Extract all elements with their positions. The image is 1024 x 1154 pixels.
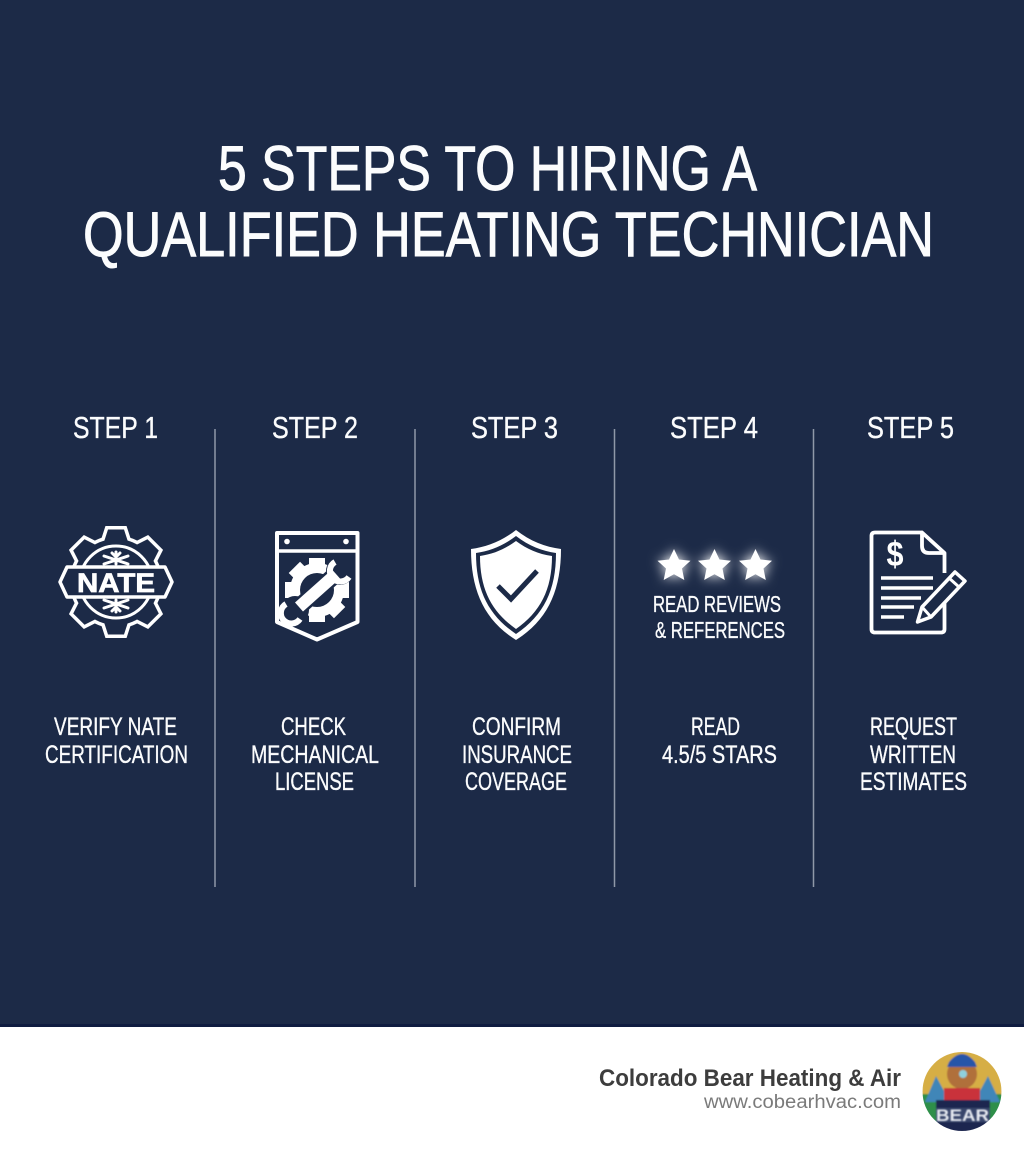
icon: written estimate document with pencil — [872, 532, 965, 632]
step 2 description: LICENSE — [275, 768, 354, 796]
step 1 description: CERTIFICATION — [45, 741, 188, 769]
logo: Colorado Bear badge — [922, 1050, 1002, 1132]
step 5 description — [860, 713, 967, 796]
step 3 description: INSURANCE — [462, 741, 572, 769]
panel: step 1 — [45, 410, 188, 769]
icon: NATE gear badge: NATE — [77, 568, 155, 598]
step 2 description: CHECK — [281, 713, 346, 741]
panel: step 4 — [653, 410, 785, 769]
step 2 heading: STEP 2 — [272, 410, 358, 445]
step 5 description: ESTIMATES — [860, 768, 967, 796]
step 2 description: MECHANICAL — [251, 741, 379, 769]
step 1 description — [45, 713, 188, 769]
step 1 description: VERIFY NATE — [54, 713, 177, 741]
panel: step 2 — [251, 410, 379, 796]
read reviews caption: & REFERENCES — [655, 617, 785, 643]
read reviews caption — [653, 591, 785, 643]
icon: three glowing stars — [658, 549, 772, 580]
step 3 description: CONFIRM — [472, 713, 561, 741]
icon: license shield with gear and wrench — [276, 533, 358, 640]
logo: Colorado Bear badge: BEAR — [936, 1106, 989, 1125]
panel: step 5 — [860, 410, 967, 796]
read reviews caption: READ REVIEWS — [653, 591, 781, 617]
step 5 description: WRITTEN — [870, 741, 956, 769]
step 5 description: REQUEST — [870, 713, 957, 741]
step 2 description — [251, 713, 379, 796]
panel: step 3 — [462, 410, 572, 796]
footer brand text: Colorado Bear Heating & Air — [599, 1065, 901, 1092]
step 3 heading: STEP 3 — [471, 410, 558, 445]
icon: insurance shield with check — [471, 530, 561, 640]
icon: NATE gear badge — [60, 530, 172, 634]
footer brand text — [599, 1065, 901, 1113]
step 3 description: COVERAGE — [465, 768, 567, 796]
step 3 description — [462, 713, 572, 796]
step 5 heading: STEP 5 — [867, 410, 954, 445]
step 4 description: 4.5/5 STARS — [662, 741, 777, 769]
footer brand text: www.cobearhvac.com — [703, 1092, 901, 1113]
step 1 heading: STEP 1 — [73, 410, 158, 445]
step 4 description: READ — [691, 713, 740, 741]
step 4 heading: STEP 4 — [670, 410, 758, 445]
step 4 description — [662, 713, 777, 769]
title: 5 STEPS TO HIRING A — [218, 134, 757, 204]
title — [83, 134, 934, 270]
icon: written estimate document with pencil: $ — [886, 535, 904, 574]
